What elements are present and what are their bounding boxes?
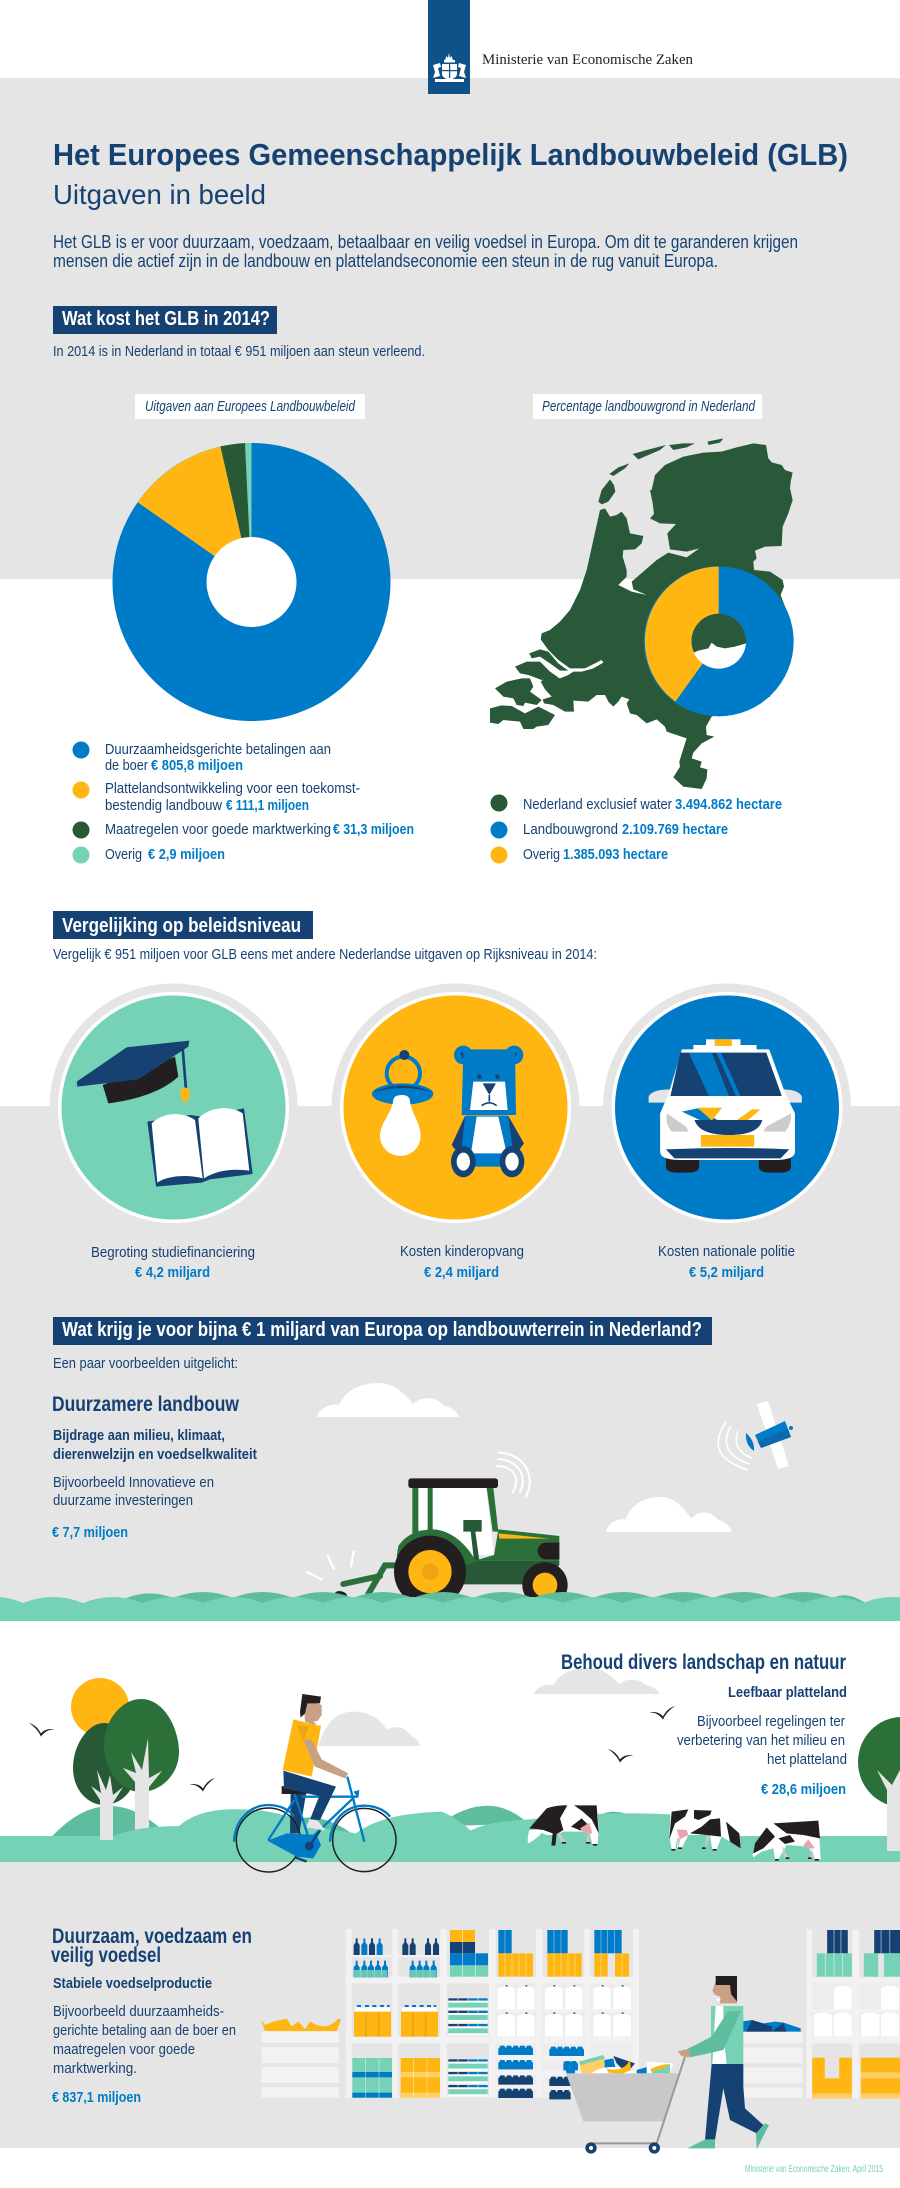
- legend item: duurzaamheid: € 805,8 miljoen: [151, 758, 243, 774]
- legend item: platteland: Plattelandsontwikkeling voor een toekomst-: [105, 781, 360, 797]
- legend: hectare: [490, 794, 782, 864]
- legend item: landbouwgrond: 2.109.769 hectare: [622, 822, 728, 838]
- text block: duurzamere landbouw: [52, 1393, 257, 1541]
- icon: book: [147, 1108, 253, 1187]
- heading: Vergelijking op beleidsniveau: Vergelijking op beleidsniveau: [62, 915, 301, 937]
- circle: studiefinanciering: [50, 984, 298, 1232]
- legend item: duurzaamheid: [72, 742, 331, 774]
- legend item: platteland: [72, 781, 360, 814]
- label: studiefinanciering: € 4,2 miljard: [135, 1264, 210, 1281]
- heading: Wat krijg je: [53, 1317, 712, 1345]
- tree: light: [104, 1699, 179, 1830]
- label: studiefinanciering: Begroting studiefinanciering: [91, 1244, 255, 1261]
- legend item: duurzaamheid: de boer: [105, 758, 148, 774]
- birds: [29, 1706, 675, 1792]
- signal waves: [497, 1453, 530, 1497]
- sun: [71, 1678, 129, 1736]
- label: percentage: [533, 394, 762, 419]
- legend item: marktwerking: Maatregelen voor goede marktwerking: [105, 822, 331, 838]
- legend item: marktwerking: € 31,3 miljoen: [333, 822, 414, 838]
- legend: uitgaven: [72, 742, 414, 864]
- label: politie: [658, 1243, 795, 1281]
- legend item: overig hectare: 1.385.093 hectare: [563, 847, 668, 863]
- frame: [268, 1777, 364, 1842]
- bottles top row: [354, 1938, 439, 1955]
- arm: [303, 1739, 348, 1778]
- tree: right edge: [858, 1717, 900, 1851]
- body: [475, 1529, 559, 1561]
- chain guard: [267, 1833, 321, 1858]
- text block: duurzamere landbouw: duurzame investeringen: [53, 1492, 193, 1509]
- illustration: cows: [528, 1805, 821, 1861]
- icon: satellite: [718, 1401, 793, 1470]
- legend item: overig hectare: Overig: [523, 847, 560, 863]
- text block: duurzamere landbouw: Duurzamere landbouw: [52, 1393, 240, 1416]
- right shelves: [740, 1929, 900, 2098]
- icon: police car: [649, 1039, 802, 1173]
- cloud: [317, 1383, 459, 1417]
- cloud behind cyclist: [318, 1712, 420, 1746]
- heading: Wat kost het GLB in 2014?: [53, 306, 277, 334]
- legend item: marktwerking: [72, 822, 414, 838]
- plough: [343, 1565, 400, 1594]
- comparison labels: [91, 1243, 795, 1281]
- subtitle: Uitgaven in beeld: [53, 179, 266, 210]
- yellow packs: [354, 2006, 438, 2037]
- shelf frame: [346, 1929, 639, 2098]
- sub text voorbeelden: Een paar voorbeelden uitgelicht:: [53, 1355, 238, 1372]
- legend item: Nederland: [490, 794, 782, 813]
- torso: [283, 1719, 321, 1777]
- text block: duurzamere landbouw: dierenwelzijn en voedselkwaliteit: [53, 1446, 257, 1463]
- cloud behind title: [534, 1668, 660, 1694]
- legend item: platteland: bestendig landbouw: [105, 798, 222, 814]
- legend item: Nederland: Nederland exclusief water: [523, 797, 672, 813]
- cart: [566, 2057, 685, 2154]
- title: Het Europees Gemeenschappelijk Landbouwbeleid (GLB): [53, 137, 848, 172]
- small packs: [498, 2046, 584, 2099]
- text block: duurzamere landbouw: Bijdrage aan milieu, klimaat,: [53, 1427, 225, 1444]
- crate right: [740, 2020, 802, 2098]
- text block: duurzaam voedsel: Bijvoorbeeld duurzaamheids-: [53, 2003, 224, 2020]
- head: [303, 1699, 322, 1725]
- text block: behoud landschap: Bijvoorbeel regelingen ter: [697, 1713, 845, 1730]
- icon: teddy bear: [451, 1046, 524, 1177]
- intro text: [53, 232, 798, 271]
- heading: Wat krijg je: Wat krijg je voor bijna € 1 miljard van Europa op landbouwterrein in Nederland?: [62, 1319, 702, 1341]
- wheels: [236, 1808, 396, 1872]
- text block: duurzaam voedsel: € 837,1 miljoen: [52, 2089, 141, 2106]
- bottom boxes: [352, 2058, 440, 2098]
- legend item: Nederland: 3.494.862 hectare: [675, 797, 782, 813]
- front leg: [283, 1771, 336, 1820]
- illustration: shopper with cart: [563, 1976, 769, 2154]
- boxes columns 4 to 6: [498, 1930, 629, 1977]
- landscape hills back: [52, 1806, 637, 1837]
- illustration: tractor: [307, 1453, 568, 1608]
- cow 1: [528, 1805, 599, 1846]
- legend item: overig hectare: [490, 846, 668, 864]
- illustration: supermarket shelves: [261, 1929, 639, 2099]
- icon: graduation cap: [77, 1041, 190, 1104]
- illustration: cyclist: [234, 1694, 396, 1872]
- groceries: [563, 2055, 673, 2074]
- legend item: landbouwgrond: [490, 822, 728, 838]
- text block: duurzaam voedsel: Duurzaam, voedzaam en: [52, 1925, 252, 1948]
- text block: duurzaam voedsel: maatregelen voor goede: [53, 2041, 195, 2058]
- cow 3: [752, 1821, 821, 1861]
- icon: pacifier: [372, 1050, 433, 1156]
- fenders: [234, 1805, 390, 1842]
- legend item: landbouwgrond: Landbouwgrond: [523, 822, 618, 838]
- shopper: [678, 1976, 769, 2149]
- back leg: [290, 1794, 306, 1833]
- legend item: platteland: € 111,1 miljoen: [226, 798, 309, 814]
- rear wheel: [394, 1536, 466, 1608]
- sub text 2014 total: In 2014 is in Nederland in totaal € 951 miljoen aan steun verleend.: [53, 343, 425, 360]
- label: politie: € 5,2 miljard: [689, 1264, 764, 1281]
- shelf frame right: [806, 1929, 900, 2098]
- legend item: duurzaamheid: Duurzaamheidsgerichte betalingen aan: [105, 742, 331, 758]
- heading: Wat kost het GLB in 2014?: Wat kost het GLB in 2014?: [62, 308, 270, 330]
- landscape hills front: [0, 1809, 900, 1862]
- saddle: [282, 1786, 307, 1794]
- donut chart: uitgaven: [112, 443, 390, 721]
- circle: kinderopvang: [332, 984, 580, 1232]
- donut: landbouwgrond: [644, 566, 794, 716]
- front wheel: [522, 1562, 568, 1608]
- crate with bananas: [261, 2018, 341, 2098]
- text block: duurzamere landbouw: Bijvoorbeeld Innovatieve en: [53, 1474, 214, 1491]
- label: politie: Kosten nationale politie: [658, 1243, 795, 1260]
- ministry name: Ministerie van Economische Zaken: [482, 52, 693, 68]
- label: percentage: Percentage landbouwgrond in Nederland: [542, 399, 756, 415]
- text block: behoud landschap: Leefbaar platteland: [728, 1684, 847, 1701]
- stacked packs: [448, 1998, 488, 2097]
- label: kinderopvang: [400, 1243, 524, 1281]
- text block: behoud landschap: het platteland: [767, 1751, 847, 1768]
- text block: duurzaam voedsel: gerichte betaling aan de boer en: [53, 2022, 236, 2039]
- text block: duurzaam voedsel: veilig voedsel: [51, 1944, 161, 1967]
- text block: duurzaam voedsel: Stabiele voedselproductie: [53, 1975, 212, 1992]
- text block: duurzaam voedsel: marktwerking.: [53, 2060, 137, 2077]
- cab: [418, 1487, 494, 1555]
- text block: behoud landschap: [561, 1651, 847, 1798]
- products right: [812, 1930, 900, 2098]
- legend item: overig: Overig: [105, 847, 142, 863]
- text block: duurzaam voedsel: [51, 1925, 252, 2106]
- trees: [73, 1699, 900, 1851]
- shoe: [307, 1819, 326, 1831]
- steering wheel: [463, 1520, 482, 1561]
- cow 2: [669, 1809, 741, 1851]
- jugs: [497, 1985, 631, 2037]
- map outline: [490, 438, 793, 789]
- logo: Rijksoverheid bar and crest: [428, 0, 470, 94]
- cloud: [606, 1497, 732, 1532]
- sub text vergelijk: Vergelijk € 951 miljoen voor GLB eens met andere Nederlandse uitgaven op Rijksniveau in 2014:: [53, 946, 597, 963]
- label: uitgaven: [135, 394, 365, 419]
- text block: behoud landschap: € 28,6 miljoen: [761, 1781, 846, 1798]
- grass: front row: [0, 1597, 900, 1621]
- label: studiefinanciering: [91, 1244, 255, 1281]
- label: kinderopvang: € 2,4 miljard: [424, 1264, 499, 1281]
- bottles second row: [354, 1961, 437, 1977]
- map: Netherlands with donut: [490, 438, 794, 789]
- text block: behoud landschap: verbetering van het milieu en: [677, 1732, 845, 1749]
- sparks: [307, 1551, 354, 1580]
- label: uitgaven: Uitgaven aan Europees Landbouwbeleid: [145, 399, 356, 415]
- text block: duurzamere landbouw: € 7,7 miljoen: [52, 1524, 128, 1541]
- legend item: overig: [72, 846, 225, 864]
- heading: Vergelijking op beleidsniveau: [53, 911, 313, 939]
- label: kinderopvang: Kosten kinderopvang: [400, 1243, 524, 1260]
- tree: dark: [73, 1723, 135, 1840]
- grass: back row: [113, 1592, 868, 1605]
- legend item: overig: € 2,9 miljoen: [148, 847, 225, 863]
- intro text: mensen die actief zijn in de landbouw en plattelandseconomie een steun in de rug vanuit Europa.: [53, 251, 718, 271]
- circle: politie: [603, 984, 851, 1232]
- boxes column 3: [450, 1930, 488, 1977]
